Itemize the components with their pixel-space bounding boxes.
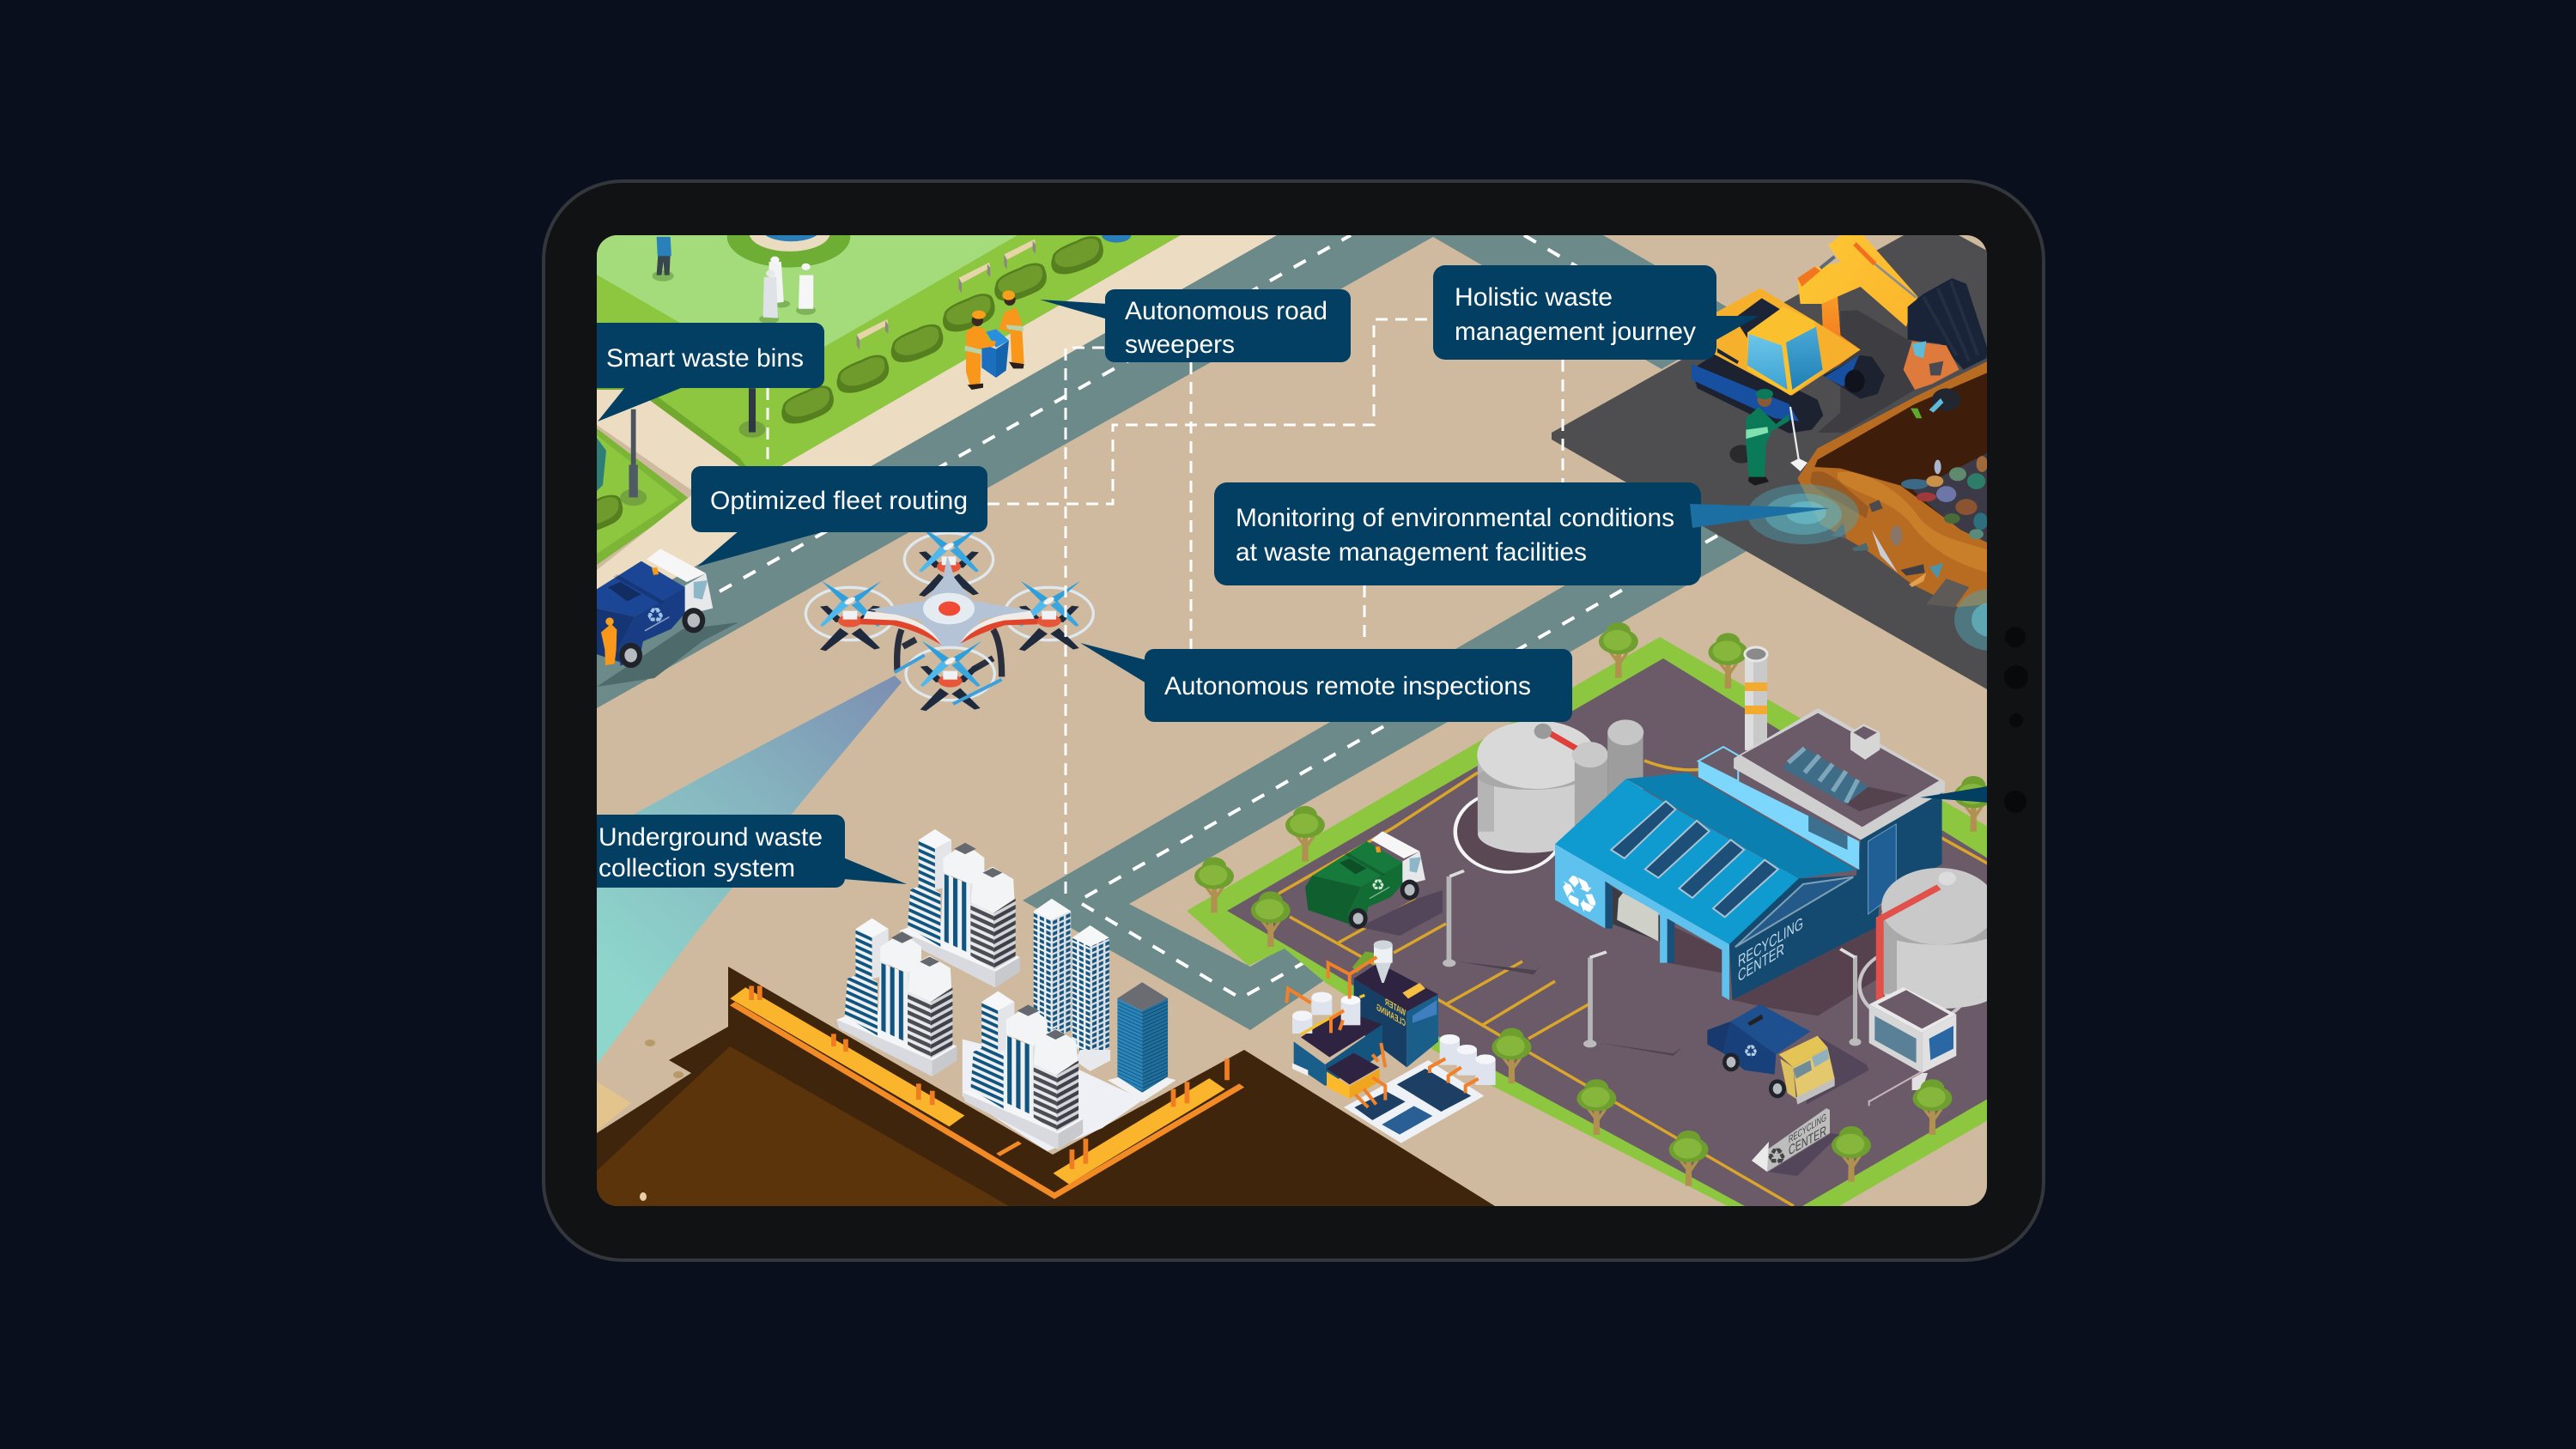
street lamps <box>620 388 766 506</box>
plant pipes <box>1301 995 1364 1034</box>
propeller: front <box>906 641 994 711</box>
red pipe <box>1880 887 1939 1000</box>
callout: facility (cropped) <box>1920 786 1988 803</box>
second water sensor <box>1954 589 2026 651</box>
upper block wall <box>1729 790 1942 1000</box>
propeller: right <box>1005 581 1093 651</box>
rear worker <box>999 290 1024 368</box>
tower cluster front <box>963 991 1083 1149</box>
panel: park <box>597 235 1277 622</box>
drone sensor beam <box>597 676 902 1064</box>
callout: fleet routing: Optimized fleet routing <box>710 487 968 515</box>
foreground trees <box>1492 1028 1952 1186</box>
tank <box>1881 868 1996 1009</box>
left storage tank <box>1455 719 1643 872</box>
excavator body <box>1700 288 1861 396</box>
yard, guardhouse and sign <box>1707 987 1956 1176</box>
plant sign <box>1376 996 1406 1029</box>
pools <box>1344 1060 1484 1143</box>
water leak sensor rings <box>1747 484 1859 544</box>
lot sign <box>1752 1108 1839 1176</box>
callout: road sweepers: Autonomous road <box>1125 297 1327 325</box>
people in white robes <box>759 257 816 324</box>
callout: smart waste bins: Smart waste bins <box>606 344 804 373</box>
propeller: rear <box>904 526 993 597</box>
landfill pit <box>1797 361 1988 607</box>
sidewalk <box>597 235 1277 622</box>
blue glass tower <box>1108 982 1176 1101</box>
excavator and landfill <box>1692 235 1988 607</box>
excavator tracks <box>1692 353 1885 433</box>
water cleaning plant <box>1286 940 1496 1143</box>
city towers and pipes <box>732 829 1242 1196</box>
recycle icon on wall: ♻ <box>1559 859 1600 931</box>
underground section <box>597 967 1495 1206</box>
person in blue <box>652 237 674 282</box>
building sign: CENTER <box>1738 940 1784 986</box>
light blue band <box>1698 761 1859 870</box>
recycling lot <box>1187 637 1988 1206</box>
dashed connector lines <box>768 319 1563 900</box>
trees <box>1194 622 1993 947</box>
building shadow <box>1732 927 1898 1016</box>
excavator shadow <box>1818 310 1915 433</box>
chimney <box>1745 647 1767 750</box>
recycling center building <box>1555 708 1945 1016</box>
small yellow block <box>1327 1053 1380 1099</box>
callout: remote inspections: Autonomous remote inspections <box>1164 672 1531 700</box>
callout: road sweepers: sweepers <box>1125 330 1235 359</box>
roof skylights <box>1611 801 1778 917</box>
drone <box>805 526 1093 711</box>
side camera dots <box>2004 627 2028 813</box>
bezel <box>544 181 2044 1260</box>
lot sign: CENTER <box>1789 1122 1826 1159</box>
drums <box>1292 992 1360 1034</box>
callout: environmental monitoring: Monitoring of environmental conditions <box>1236 504 1674 532</box>
worker at truck <box>601 617 617 665</box>
screen illustration <box>566 206 2026 1206</box>
truck body <box>597 549 713 668</box>
recycling mark: ♻ <box>1743 1042 1759 1061</box>
callout: remote inspections <box>1080 643 1572 722</box>
callout: underground collection: Underground waste <box>598 823 823 852</box>
callout: holistic journey <box>1433 265 1759 360</box>
ground <box>597 235 1987 1206</box>
tablet device <box>544 181 2044 1260</box>
skids <box>895 655 1002 704</box>
callout: holistic journey: Holistic waste <box>1455 283 1613 312</box>
inspector worker <box>1729 389 1807 486</box>
landfill pad <box>1552 235 1987 689</box>
plant sign: CLEANING <box>1376 1001 1406 1029</box>
street lamps <box>1443 870 1683 1056</box>
excavator cab <box>1747 306 1823 396</box>
lot sign: RECYCLING <box>1789 1111 1826 1146</box>
central plaza <box>963 1040 1143 1151</box>
waste heap <box>1901 452 1988 543</box>
right storage tank <box>1840 868 1996 1046</box>
yellow and orange pipes <box>732 985 1242 1196</box>
pond <box>1102 235 1132 243</box>
waste falling from bucket <box>1904 341 1960 418</box>
propeller: left <box>805 581 895 651</box>
callout: environmental monitoring <box>1214 482 1830 585</box>
parking lines <box>1279 773 1988 1206</box>
glass curtain <box>1868 824 1896 914</box>
park details <box>571 206 1131 533</box>
tower cluster back <box>899 829 1020 988</box>
building sign: RECYCLING <box>1738 913 1803 972</box>
fountain <box>726 235 850 268</box>
front block <box>1292 1010 1382 1086</box>
drone body <box>860 555 1037 648</box>
pool drums <box>1440 1034 1496 1085</box>
callout: smart waste bins <box>584 323 824 421</box>
bucket <box>1908 278 1988 370</box>
callout: environmental monitoring: at waste management facilities <box>1236 538 1587 567</box>
ring <box>1860 947 1969 1024</box>
blue bin <box>981 329 1009 378</box>
main roof <box>1555 779 1799 944</box>
road network upper <box>597 235 1748 708</box>
rear block <box>1354 963 1438 1067</box>
recycling mark: ♻ <box>646 603 665 627</box>
front wall <box>1555 844 1729 1000</box>
benches <box>857 239 1036 350</box>
callout: road sweepers <box>1040 289 1351 362</box>
blue collection truck <box>597 549 738 687</box>
upper roof <box>1734 708 1945 840</box>
lamp <box>1840 949 1862 1046</box>
pipe behind building <box>1644 761 1704 770</box>
lower park bin <box>597 438 606 491</box>
silo <box>1374 940 1393 983</box>
twin window towers <box>1034 899 1110 1071</box>
blue yard truck <box>1707 1004 1869 1105</box>
road network lower <box>1023 516 1747 1030</box>
truck shadow <box>597 622 738 687</box>
callout: underground collection <box>584 815 907 888</box>
recycling mark: ♻ <box>1371 876 1385 894</box>
plant sign: WATER <box>1385 996 1406 1019</box>
truck body <box>1305 831 1425 929</box>
excavator boom <box>1797 235 1917 373</box>
lot sign: ♻ <box>1766 1144 1787 1170</box>
gable glass <box>1735 877 1853 947</box>
green collection truck <box>1305 831 1443 936</box>
callout: underground collection: collection system <box>598 854 795 882</box>
landing legs <box>897 629 1002 676</box>
workers with bin <box>964 290 1024 390</box>
guardhouse <box>1869 987 1956 1106</box>
hedges <box>571 236 1103 533</box>
callout: fleet routing <box>691 466 987 567</box>
tower cluster left <box>836 919 957 1076</box>
green roof patch <box>1352 951 1374 973</box>
debris <box>1832 500 1969 607</box>
callout: holistic journey: management journey <box>1455 318 1696 346</box>
truck shadow <box>1359 890 1443 936</box>
front worker <box>964 311 996 390</box>
